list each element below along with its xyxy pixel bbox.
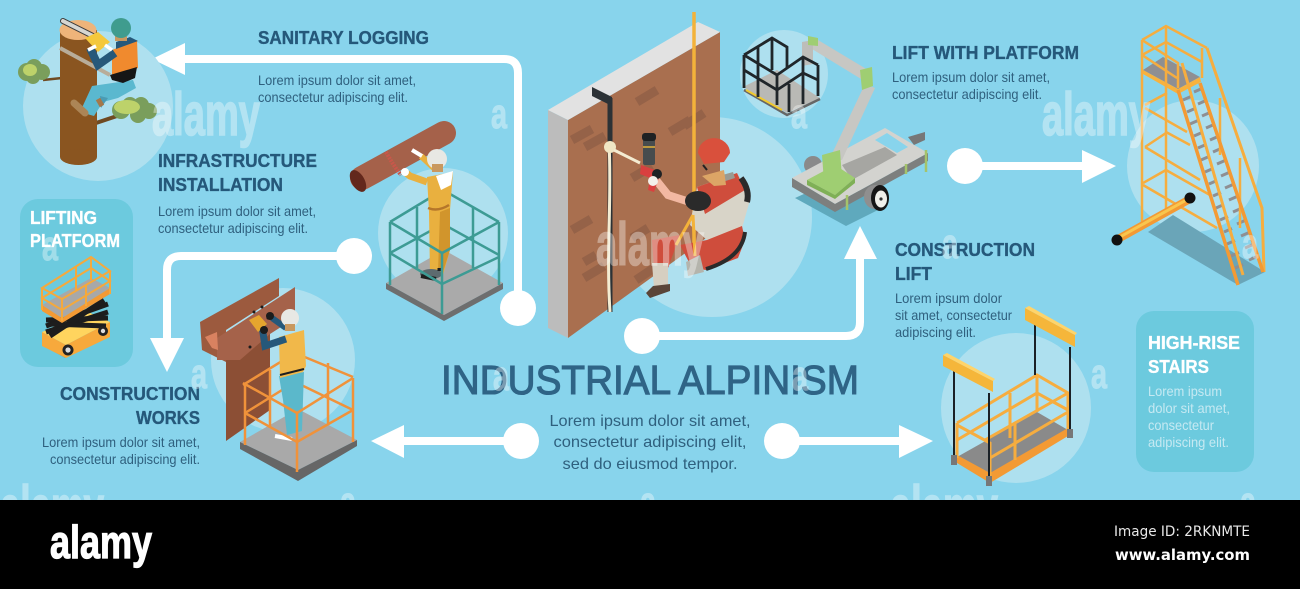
icon: scissor lift (42, 257, 110, 358)
heading: high-rise stairs (1148, 333, 1240, 377)
text: high-rise description: dolor sit amet, (1148, 400, 1230, 416)
text: sanitary logging description (258, 72, 416, 105)
watermarks: a (493, 352, 509, 399)
text: construction lift description: Lorem ipsum dolor (895, 290, 1002, 306)
heading: infrastructure installation: INSTALLATION (158, 175, 283, 195)
illustration: construction lift cradle (941, 306, 1091, 486)
watermarks: a (791, 90, 807, 137)
watermarks: a (340, 478, 356, 525)
text: lift with platform description: consectetur adipiscing elit. (892, 86, 1042, 102)
heading: lifting platform: PLATFORM (30, 231, 120, 251)
heading: construction works (60, 384, 200, 428)
heading: construction lift: LIFT (895, 264, 932, 284)
watermarks: a (42, 222, 58, 269)
footer image id (1114, 524, 1250, 564)
text: sanitary logging description: consectetur adipiscing elit. (258, 89, 408, 105)
watermarks: alamy (0, 474, 104, 541)
watermarks: a (191, 350, 207, 397)
panel: high-rise stairs (1136, 311, 1254, 472)
text: construction works description (42, 434, 200, 467)
footer image id: Image ID: 2RKNMTE (1114, 524, 1250, 540)
illustration: tree logger (18, 18, 173, 181)
illustration: lift with platform (740, 30, 928, 226)
text: construction lift description: sit amet, consectetur (895, 307, 1012, 323)
illustration: rope access worker on wall (548, 12, 812, 338)
arrow: left from title (371, 423, 539, 459)
footer logo: alamy (50, 516, 152, 568)
heading: infrastructure installation: INFRASTRUCTURE (158, 151, 317, 171)
heading: sanitary logging: SANITARY LOGGING (258, 28, 429, 48)
heading: lifting platform (30, 208, 120, 251)
watermarks: alamy (890, 474, 998, 541)
text: construction works description: Lorem ipsum dolor sit amet, (42, 434, 200, 450)
text: infrastructure description (158, 203, 316, 236)
heading: construction works: WORKS (136, 408, 200, 428)
text: high-rise description: Lorem ipsum (1148, 383, 1222, 399)
illustration: construction works worker (200, 278, 357, 481)
text: lift with platform description: Lorem ipsum dolor sit amet, (892, 69, 1050, 85)
text: high-rise description: consectetur (1148, 417, 1214, 433)
arrow: to high-rise stairs (947, 148, 1116, 184)
heading: construction lift: CONSTRUCTION (895, 240, 1035, 260)
heading: high-rise stairs: STAIRS (1148, 357, 1209, 377)
heading: construction lift (895, 240, 1035, 284)
watermarks: a (942, 220, 958, 267)
text: central description: sed do eiusmod tempor. (562, 456, 738, 473)
watermarks: alamy (596, 211, 704, 278)
arrow: to sanitary logging (152, 43, 536, 326)
title: INDUSTRIAL ALPINISM (441, 357, 859, 403)
watermarks: a (1240, 478, 1256, 525)
text: construction lift description: adipiscing elit. (895, 324, 976, 340)
watermarks: a (1091, 350, 1107, 397)
heading: construction works: CONSTRUCTION (60, 384, 200, 404)
text: central description: consectetur adipiscing elit, (554, 434, 746, 451)
text: sanitary logging description: Lorem ipsum dolor sit amet, (258, 72, 416, 88)
panel: lifting platform (20, 199, 133, 367)
heading: lift with platform: LIFT WITH PLATFORM (892, 43, 1079, 63)
watermarks: alamy (1042, 81, 1150, 148)
heading: high-rise stairs: HIGH-RISE (1148, 333, 1240, 353)
text: construction lift description (895, 290, 1012, 340)
watermarks: a (491, 90, 507, 137)
arrow: to construction works (150, 238, 372, 372)
text: infrastructure description: Lorem ipsum dolor sit amet, (158, 203, 316, 219)
arrow: to lift with platform (624, 226, 877, 354)
text: high-rise description (1148, 383, 1230, 450)
illustration: high-rise stairs (1112, 26, 1265, 285)
watermarks: a (1242, 220, 1258, 267)
heading: infrastructure installation (158, 151, 317, 195)
watermarks: a (792, 352, 808, 399)
text: infrastructure description: consectetur adipiscing elit. (158, 220, 308, 236)
arrow: right from title (764, 423, 933, 459)
watermarks (0, 81, 1258, 541)
watermarks: alamy (152, 81, 260, 148)
illustration: pipe worker (346, 133, 508, 321)
text: central description (550, 413, 750, 473)
heading: lifting platform: LIFTING (30, 208, 97, 228)
text: central description: Lorem ipsum dolor sit amet, (550, 413, 750, 430)
footer bar (0, 500, 1300, 589)
text: construction works description: consectetur adipiscing elit. (50, 451, 200, 467)
text: high-rise description: adipiscing elit. (1148, 434, 1229, 450)
watermarks: a (640, 478, 656, 525)
text: lift with platform description (892, 69, 1050, 102)
footer image id: www.alamy.com (1115, 546, 1250, 564)
